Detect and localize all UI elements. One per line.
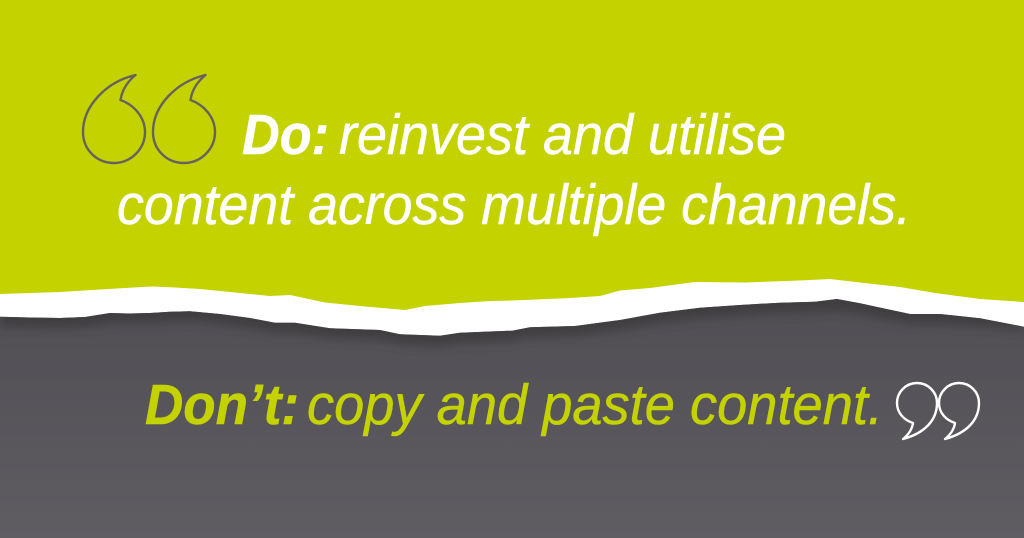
heading: do statement: Do: — [242, 103, 329, 167]
green background panel — [0, 0, 1024, 320]
icon: closing quotation marks — [897, 383, 979, 439]
dark grey torn panel — [0, 289, 1024, 538]
heading: don't statement: copy and paste content. — [307, 373, 883, 437]
heading: do statement: content across multiple channels. — [117, 173, 911, 237]
icon: opening quotation marks — [83, 75, 215, 163]
torn white paper strip — [0, 279, 1024, 340]
heading: don't statement: Don’t: — [145, 373, 299, 437]
heading: do statement — [117, 103, 911, 237]
heading: do statement: reinvest and utilise — [339, 103, 786, 167]
